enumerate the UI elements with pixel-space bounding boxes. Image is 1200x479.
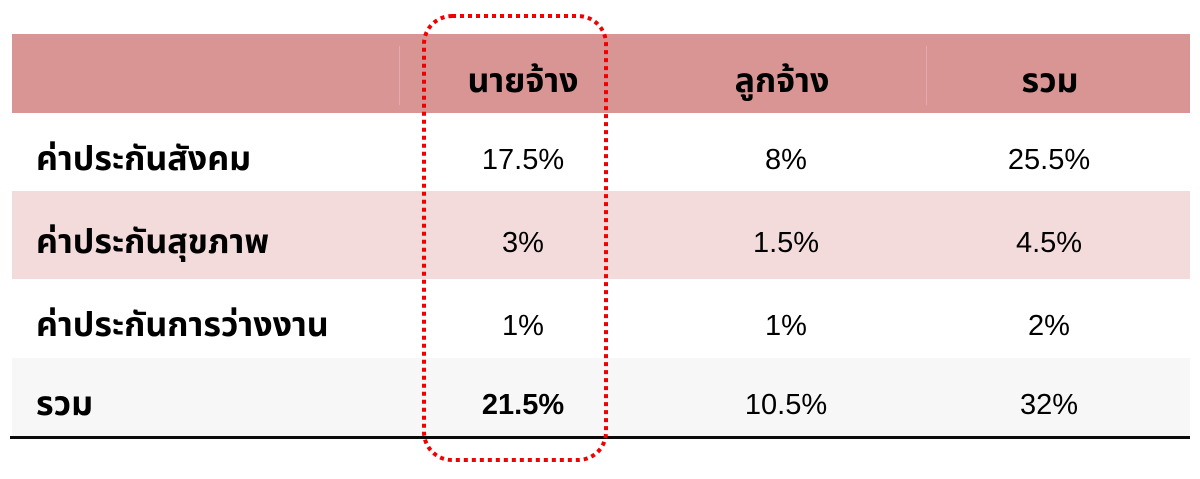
value: employer unemployment insurance: 1%: [502, 310, 544, 342]
row label: total: รวม: [36, 385, 93, 423]
header row background: [12, 34, 1190, 113]
value: total social security: 25.5%: [1008, 144, 1090, 176]
header: employer: นายจ้าง: [467, 62, 579, 100]
value: employee health insurance: 1.5%: [753, 227, 819, 259]
value: employer health insurance: 3%: [502, 227, 544, 259]
value: employee unemployment insurance: 1%: [765, 310, 807, 342]
row background: total: [12, 358, 1190, 436]
value: employer social security: 17.5%: [482, 144, 564, 176]
value: total health insurance: 4.5%: [1016, 227, 1082, 259]
header: total: รวม: [1021, 62, 1079, 100]
bottom rule: [10, 436, 1190, 439]
value: employer total: 21.5%: [482, 389, 564, 421]
header: employee: ลูกจ้าง: [735, 62, 829, 100]
row label: health insurance: ค่าประกันสุขภาพ: [36, 223, 269, 261]
row background: health insurance: [12, 191, 1190, 279]
value: grand total: 32%: [1020, 389, 1078, 421]
value: employee social security: 8%: [765, 144, 807, 176]
value: total unemployment insurance: 2%: [1028, 310, 1070, 342]
row label: social security: ค่าประกันสังคม: [36, 140, 251, 178]
value: employee total: 10.5%: [745, 389, 827, 421]
row label: unemployment insurance: ค่าประกันการว่างงาน: [36, 306, 329, 344]
